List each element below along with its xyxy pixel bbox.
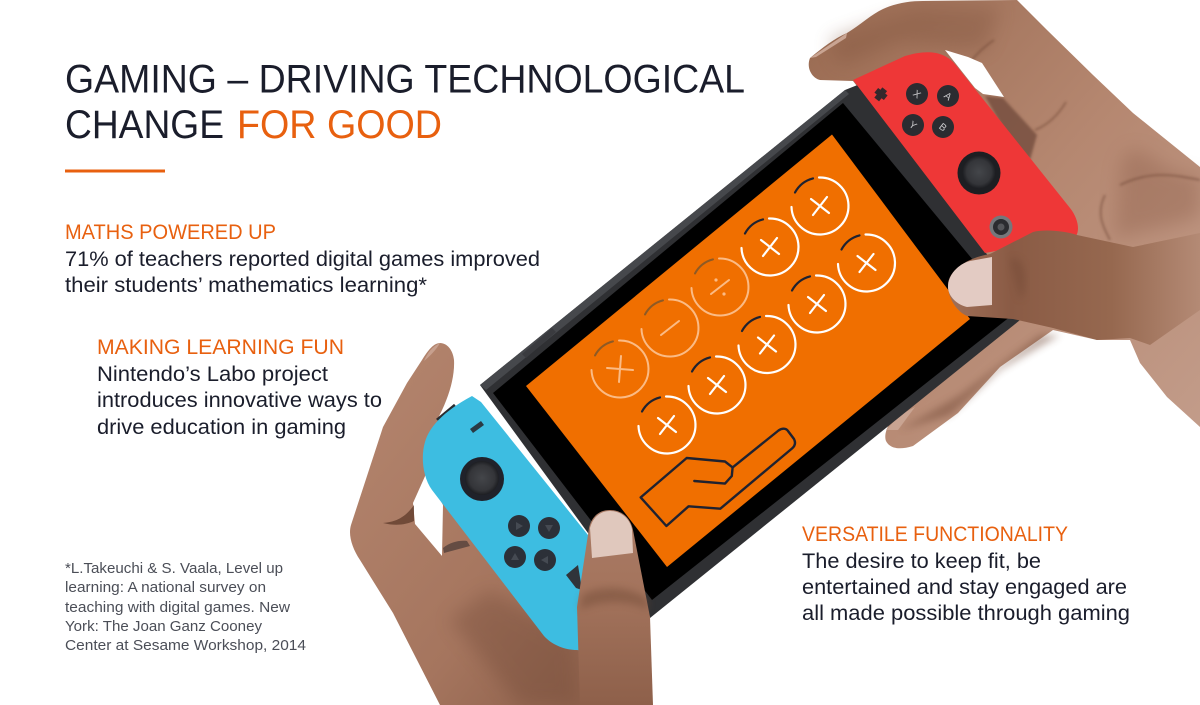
text block: making learning fun: introduces innovative ways to [97, 388, 382, 412]
title: FOR GOOD [237, 103, 442, 147]
text block: making learning fun: Nintendo’s Labo project [97, 362, 328, 386]
right analog stick [958, 152, 1000, 194]
text block: maths powered up: their students’ mathematics learning* [65, 273, 428, 297]
blue joy-con [423, 396, 592, 652]
footnote citation: *L.Takeuchi & S. Vaala, Level up [65, 560, 283, 577]
text block: maths powered up: 71% of teachers reported digital games improved [65, 247, 540, 271]
footnote citation [65, 560, 306, 654]
text block: versatile functionality: VERSATILE FUNCTIONALITY [802, 522, 1068, 546]
right thumb [948, 231, 1200, 345]
text block: versatile functionality [802, 522, 1130, 625]
right hand behind the console [809, 0, 1200, 448]
title: CHANGE [65, 103, 224, 147]
red joy-con [853, 52, 1078, 253]
text block: versatile functionality: The desire to keep fit, be [802, 549, 1041, 573]
text block: versatile functionality: all made possible through gaming [802, 601, 1130, 625]
shading: finger crease [383, 505, 414, 525]
shading: finger behind joy-con [985, 96, 1037, 160]
text block: maths powered up: MATHS POWERED UP [65, 220, 276, 244]
face buttons: X [910, 88, 923, 101]
left analog stick [460, 457, 504, 501]
face buttons: Y [906, 119, 919, 132]
shading: lower finger [900, 335, 1060, 430]
capture button [566, 565, 582, 590]
home button [990, 216, 1012, 238]
text block: making learning fun: MAKING LEARNING FUN [97, 335, 344, 359]
footnote citation: learning: A national survey on [65, 579, 266, 596]
rings: active plus buttons [638, 177, 895, 453]
shadow rim of shoulder button [437, 405, 455, 420]
direction buttons [504, 515, 560, 571]
left hand behind the console [350, 343, 640, 705]
title [65, 58, 745, 147]
thumb nail [948, 257, 992, 307]
white gap between fingers [413, 474, 443, 556]
console body [480, 84, 1030, 618]
thumb knuckle crease [580, 588, 648, 610]
shading: top finger [830, 8, 1000, 66]
orange screen [526, 134, 970, 567]
footnote citation: York: The Joan Ganz Cooney [65, 618, 262, 635]
title: GAMING – DRIVING TECHNOLOGICAL [65, 58, 745, 102]
shading: palm crease [1115, 150, 1200, 240]
left thumb [577, 510, 653, 705]
faded ring: minus [642, 299, 698, 356]
face buttons: A [941, 90, 954, 103]
face buttons: B [936, 121, 949, 134]
footnote citation: Center at Sesame Workshop, 2014 [65, 637, 306, 654]
screen bezel [493, 103, 1016, 600]
text block: versatile functionality: entertained and stay engaged are [802, 575, 1127, 599]
thumb nail [590, 511, 633, 558]
text block: making learning fun: drive education in gaming [97, 415, 346, 439]
text block: making learning fun [97, 335, 382, 439]
skin creases [972, 40, 1200, 240]
shading: knuckle [1010, 258, 1025, 300]
plus button [872, 86, 889, 103]
footnote citation: teaching with digital games. New [65, 599, 290, 616]
faded ring: divide [692, 258, 748, 315]
face buttons [902, 83, 959, 138]
icon: hand outline [641, 429, 795, 526]
slot [470, 421, 484, 433]
text block: maths powered up [65, 220, 540, 297]
faded ring: plus [592, 340, 648, 397]
